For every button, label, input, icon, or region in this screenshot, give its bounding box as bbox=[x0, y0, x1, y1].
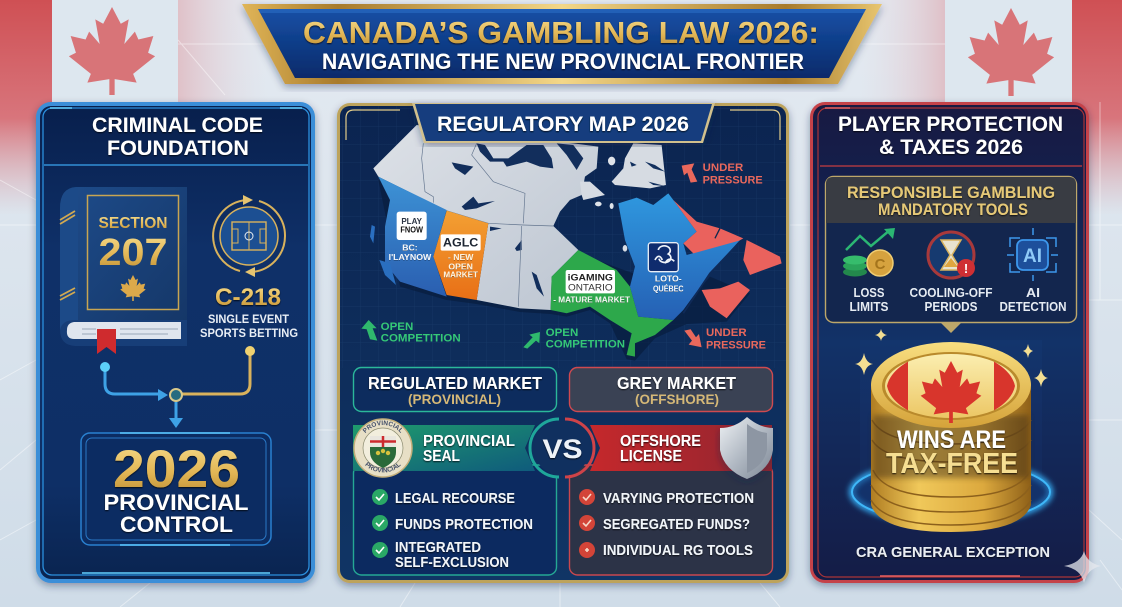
wins are tax-free text: TAX-FREE bbox=[886, 448, 1018, 480]
subtitle: NAVIGATING THE NEW PROVINCIAL FRONTIER bbox=[322, 49, 804, 74]
arrow label: under pressure north: UNDER bbox=[703, 162, 743, 174]
offshore license bar: OFFSHORE bbox=[620, 433, 701, 450]
British Columbia bbox=[378, 177, 447, 297]
regulated benefits: SELF-EXCLUSION bbox=[395, 554, 509, 571]
provincial seal bar: PROVINCIAL bbox=[423, 433, 515, 450]
callout: 2026 provincial control: 2026 bbox=[113, 440, 240, 499]
Quebec label bbox=[653, 274, 684, 294]
regulated market header: (PROVINCIAL) bbox=[408, 391, 501, 407]
grey market header bbox=[570, 368, 772, 412]
callout: responsible gambling tools: RESPONSIBLE GAMBLING bbox=[847, 183, 1055, 202]
icon: loss limits: C bbox=[875, 256, 886, 273]
arctic channels and lakes bbox=[452, 143, 583, 297]
callout: 2026 provincial control bbox=[81, 433, 271, 545]
regulated benefits: LEGAL RECOURSE bbox=[395, 490, 515, 507]
provincial seal bar bbox=[353, 425, 535, 471]
icon: section 207 law book: SECTION bbox=[98, 215, 168, 232]
Quebec label: LOTO- bbox=[655, 274, 682, 284]
arrow label: open competition south bbox=[523, 327, 625, 351]
offshore license bar bbox=[590, 425, 772, 471]
regulated benefits: INTEGRATED bbox=[395, 539, 481, 556]
sparkle decorations bbox=[855, 329, 1048, 387]
icon: offshore shield bbox=[720, 417, 773, 479]
arrow label: under pressure north bbox=[682, 162, 763, 186]
logo: PlayNow: PLAY bbox=[401, 216, 422, 226]
panel: regulatory map and market comparison bbox=[332, 100, 794, 591]
arrow label: open competition south: OPEN bbox=[546, 327, 578, 339]
Quebec bbox=[618, 193, 740, 320]
title banner bbox=[242, 4, 882, 84]
regulated market header bbox=[354, 368, 556, 412]
main title: CANADA’S GAMBLING LAW 2026: bbox=[303, 15, 819, 50]
Quebec label: QUÉBEC bbox=[653, 284, 684, 294]
Alberta label: - NEW bbox=[448, 252, 474, 262]
arrow label: under pressure south: PRESSURE bbox=[706, 339, 766, 351]
panel heading: CRIMINAL CODE bbox=[92, 114, 263, 137]
icon: AI detection bbox=[1007, 228, 1058, 281]
map drop shadow bbox=[378, 180, 750, 361]
icon: loss limits bbox=[843, 228, 895, 276]
offshore caveats: SEGREGATED FUNDS? bbox=[603, 516, 750, 533]
grey market header: GREY MARKET bbox=[617, 373, 736, 393]
tool labels bbox=[850, 286, 1066, 314]
panel heading: & TAXES 2026 bbox=[879, 136, 1023, 159]
Ontario bbox=[551, 250, 673, 357]
panel heading: FOUNDATION bbox=[107, 137, 249, 160]
icon: provincial seal bbox=[353, 418, 413, 478]
offshore caveats: VARYING PROTECTION bbox=[603, 490, 754, 507]
logo: PlayNow bbox=[397, 212, 427, 240]
Alberta label bbox=[443, 252, 479, 280]
tool labels: PERIODS bbox=[924, 300, 978, 314]
icon: AI detection: AI bbox=[1023, 246, 1042, 267]
map heading tab: REGULATORY MAP 2026 bbox=[437, 113, 689, 136]
Alberta label: MARKET bbox=[443, 270, 479, 280]
icon: cooling-off hourglass: ! bbox=[964, 261, 968, 276]
C-218 label: SPORTS BETTING bbox=[200, 326, 298, 340]
grey market header: (OFFSHORE) bbox=[635, 391, 719, 407]
icon: provincial seal: PROVINCIAL bbox=[362, 420, 402, 433]
BC label: I'LAYNOW bbox=[389, 252, 432, 262]
offshore caveats: INDIVIDUAL RG TOOLS bbox=[603, 542, 753, 559]
logo: iGaming Ontario: ONTARIO bbox=[568, 282, 613, 292]
logo: AGLC: AGLC bbox=[443, 236, 479, 250]
tool labels: COOLING-OFF bbox=[910, 286, 993, 300]
territorial borders bbox=[422, 143, 553, 307]
panel heading bbox=[838, 113, 1063, 159]
C-218 label bbox=[200, 284, 298, 340]
C-218 label: SINGLE EVENT bbox=[208, 312, 290, 326]
tool labels: AI bbox=[1026, 286, 1040, 300]
panel heading bbox=[92, 114, 263, 160]
panel: criminal code foundation bbox=[36, 102, 315, 583]
arrow label: open competition west: OPEN bbox=[381, 321, 413, 333]
logo: PlayNow: FNOW bbox=[400, 224, 423, 234]
arrow label: open competition south: COMPETITION bbox=[546, 339, 625, 351]
icon: cooling-off hourglass bbox=[928, 232, 975, 278]
arrow label: under pressure north: PRESSURE bbox=[703, 174, 763, 186]
Alberta label: OPEN bbox=[448, 261, 473, 271]
arrow label: open competition west: COMPETITION bbox=[381, 333, 461, 345]
regulated market header: REGULATED MARKET bbox=[368, 373, 542, 393]
wins are tax-free text: WINS ARE bbox=[897, 426, 1006, 454]
icon: provincial seal: PROVINCIAL bbox=[365, 462, 401, 473]
provincial seal bar: SEAL bbox=[423, 448, 460, 465]
arrow label: under pressure south: UNDER bbox=[706, 327, 747, 339]
callout: responsible gambling tools: MANDATORY TOOLS bbox=[878, 200, 1028, 219]
red status icons bbox=[579, 489, 595, 558]
offshore license bar: LICENSE bbox=[620, 448, 682, 465]
arctic islands bbox=[580, 143, 666, 200]
C-218 label: C-218 bbox=[215, 284, 281, 311]
offshore caveats bbox=[603, 490, 754, 559]
icon: section 207 law book: 207 bbox=[98, 232, 168, 274]
callout: responsible gambling tools bbox=[826, 176, 1076, 333]
grey territories and prairies bbox=[373, 125, 598, 310]
icon: section 207 law book bbox=[60, 187, 187, 354]
icon: VS badge bbox=[530, 419, 594, 477]
regulated benefits: FUNDS PROTECTION bbox=[395, 516, 533, 533]
Ontario label: - MATURE MARKET bbox=[553, 295, 631, 305]
callout: 2026 provincial control: PROVINCIAL bbox=[104, 490, 248, 515]
callout: 2026 provincial control: CONTROL bbox=[120, 512, 233, 537]
arrow label: under pressure south bbox=[684, 327, 766, 351]
regulated market list panel bbox=[354, 465, 556, 575]
BC label: BC: bbox=[402, 243, 418, 253]
panel heading: PLAYER PROTECTION bbox=[838, 113, 1063, 136]
icon: tax-free coin stack bbox=[852, 340, 1050, 532]
Atlantic provinces bbox=[673, 200, 782, 318]
Alberta bbox=[433, 211, 488, 300]
corner sparkle watermark bbox=[1064, 551, 1101, 583]
grey market list panel bbox=[570, 465, 772, 575]
panel: player protection and taxes bbox=[810, 102, 1089, 583]
map heading tab bbox=[412, 103, 715, 143]
tool labels: LIMITS bbox=[850, 300, 888, 314]
BC label bbox=[389, 243, 432, 262]
green check icons bbox=[372, 489, 388, 558]
icon: VS badge: VS bbox=[542, 434, 582, 464]
tool labels: DETECTION bbox=[1000, 300, 1066, 314]
icon: C-218 sports betting circle bbox=[213, 195, 285, 277]
arrow: converging connectors bbox=[100, 346, 255, 428]
logo: iGaming Ontario: iGAMING bbox=[568, 272, 613, 282]
regulated benefits bbox=[395, 490, 533, 571]
logo: iGaming Ontario bbox=[566, 270, 615, 293]
wins are tax-free text bbox=[886, 426, 1018, 480]
map of Canada bbox=[361, 125, 782, 361]
logo: Loto-Quebec bbox=[648, 243, 678, 272]
arrow label: open competition west bbox=[361, 320, 461, 345]
tool labels: LOSS bbox=[854, 286, 884, 300]
CRA footnote: CRA GENERAL EXCEPTION bbox=[856, 544, 1050, 561]
